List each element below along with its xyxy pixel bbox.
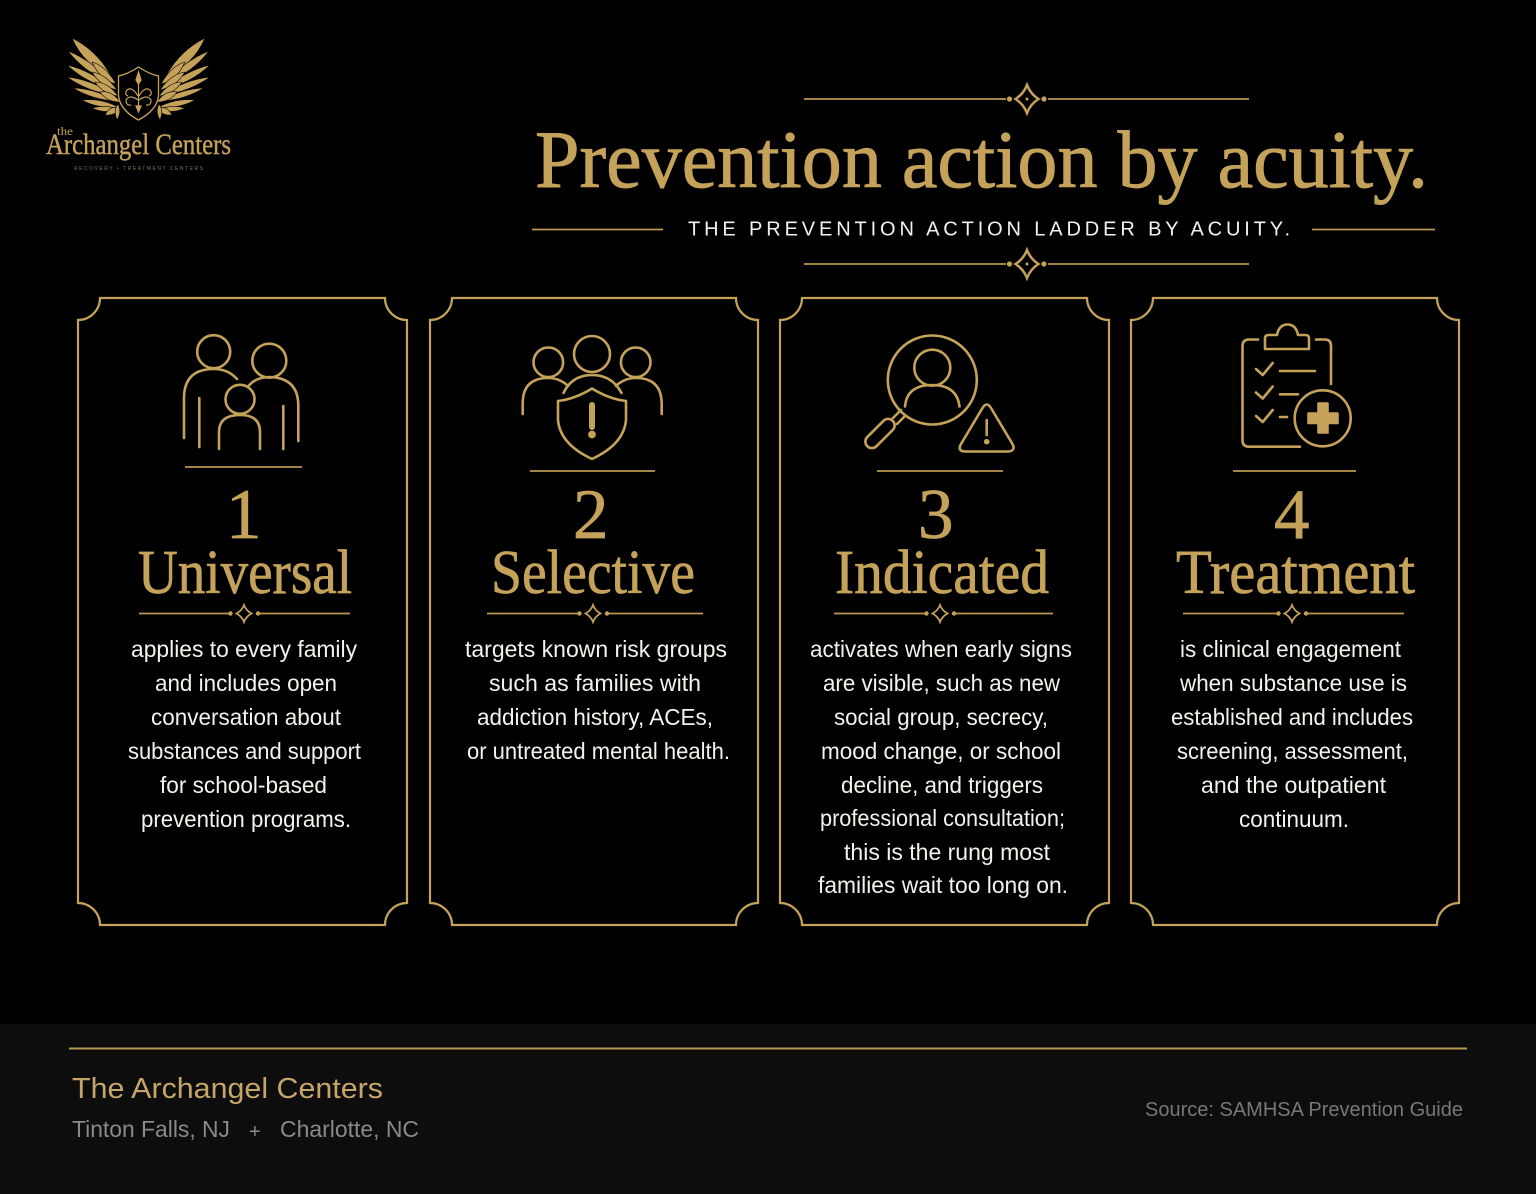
logo: right wing <box>157 38 210 120</box>
description: professional consultation; <box>820 805 1065 831</box>
top ornament <box>804 85 1249 113</box>
lower title ornament <box>804 250 1249 278</box>
card frame <box>1131 298 1459 925</box>
title: Prevention action by acuity. <box>535 114 1428 205</box>
description: or untreated mental health. <box>467 738 730 764</box>
ornament <box>487 605 703 622</box>
description: substances and support <box>128 738 362 764</box>
footer <box>0 1024 1536 1194</box>
number: 3 <box>918 476 954 554</box>
description: and the outpatient <box>1201 772 1387 798</box>
icon: magnifier with warning <box>863 336 1014 452</box>
description: families wait too long on. <box>818 872 1068 898</box>
card frame <box>430 298 758 925</box>
description: are visible, such as new <box>823 670 1060 696</box>
footer: locations: + <box>249 1121 261 1143</box>
heading: Treatment <box>1176 539 1415 607</box>
panel: indicated <box>780 298 1109 925</box>
divider <box>1233 470 1356 472</box>
description: applies to every family <box>131 636 357 662</box>
description: such as families with <box>489 670 701 696</box>
subtitle: THE PREVENTION ACTION LADDER BY ACUITY. <box>688 218 1290 240</box>
panel: treatment <box>1131 298 1459 925</box>
icon: group with shield <box>523 336 662 459</box>
logo: shield <box>118 67 158 120</box>
footer: source: Source: SAMHSA Prevention Guide <box>1145 1099 1463 1121</box>
divider <box>530 470 655 472</box>
description <box>810 636 1072 898</box>
description: established and includes <box>1171 704 1413 730</box>
heading: Indicated <box>835 539 1049 607</box>
description: addiction history, ACEs, <box>477 704 713 730</box>
description: prevention programs. <box>141 806 351 832</box>
description <box>1171 636 1413 832</box>
card frame <box>78 298 407 925</box>
divider <box>877 470 1003 472</box>
number: 1 <box>226 476 262 554</box>
logo: wordmark: Archangel Centers <box>46 128 231 161</box>
description: when substance use is <box>1179 670 1407 696</box>
ornament <box>834 605 1053 622</box>
logo: left wing <box>67 38 120 120</box>
description: decline, and triggers <box>841 772 1043 798</box>
description: and includes open <box>155 670 337 696</box>
footer: locations: Charlotte, NC <box>280 1116 419 1142</box>
description: social group, secrecy, <box>834 704 1048 730</box>
description: screening, assessment, <box>1177 738 1408 764</box>
number: 4 <box>1274 476 1310 554</box>
logo: wordmark: the <box>57 124 73 138</box>
logo: wordmark <box>46 124 231 172</box>
number: 2 <box>573 476 608 554</box>
divider <box>185 466 302 468</box>
logo: wordmark: RECOVERY • TREATMENT CENTERS <box>74 166 204 172</box>
logo <box>46 38 231 172</box>
description: this is the rung most <box>844 839 1051 865</box>
description <box>465 636 730 764</box>
description: targets known risk groups <box>465 636 727 662</box>
panel: universal <box>78 298 407 925</box>
footer: locations <box>72 1116 419 1143</box>
heading: Selective <box>491 539 695 607</box>
description: mood change, or school <box>821 738 1061 764</box>
ornament <box>1183 605 1404 622</box>
card frame <box>780 298 1109 925</box>
heading: Universal <box>138 539 352 607</box>
description <box>128 636 362 832</box>
description: is clinical engagement <box>1180 636 1402 662</box>
footer: locations: Tinton Falls, NJ <box>72 1116 230 1142</box>
panel: selective <box>430 298 758 925</box>
icon: clipboard with medical plus <box>1242 324 1351 447</box>
ornament <box>139 605 350 622</box>
footer: organization name: The Archangel Centers <box>72 1073 383 1105</box>
description: for school-based <box>160 772 327 798</box>
description: continuum. <box>1239 806 1349 832</box>
icon: family <box>184 335 298 449</box>
description: conversation about <box>151 704 342 730</box>
description: activates when early signs <box>810 636 1072 662</box>
